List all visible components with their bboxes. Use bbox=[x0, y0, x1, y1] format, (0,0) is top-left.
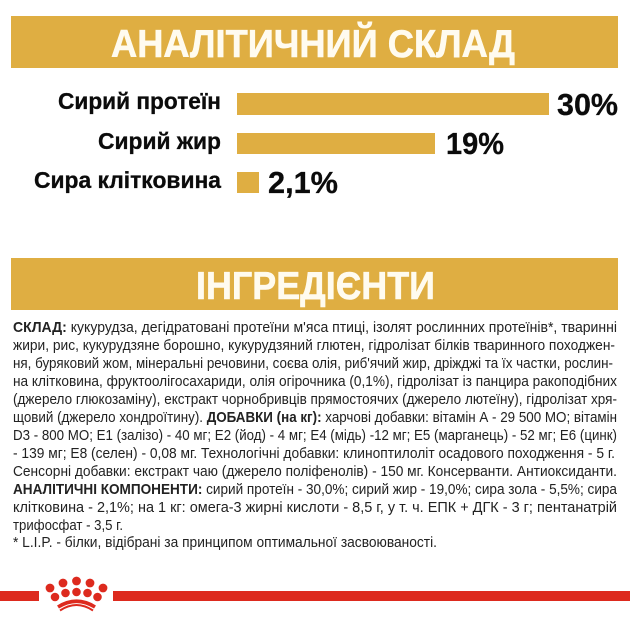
row: crude fat: Сирий жир bbox=[98, 128, 221, 154]
row: crude fibre: 2,1% bbox=[268, 165, 338, 200]
ingredients text block: клітковина - 2,1%; на 1 кг: омега-3 жирні кислоти - 8,5 г, у т. ч. ЕПК + ДГК - 3 г; пентанатрій bbox=[13, 499, 617, 516]
row: crude protein: Сирий протеїн bbox=[58, 88, 221, 114]
row: crude protein: 30% bbox=[557, 87, 618, 122]
row: crude fat: 19% bbox=[446, 126, 504, 161]
row: crude fat bbox=[98, 126, 504, 161]
heading band: ingredients: ІНГРЕДІЄНТИ bbox=[196, 265, 435, 308]
red footer line left bbox=[0, 591, 39, 601]
row: crude fibre: Сира клітковина bbox=[34, 167, 221, 193]
row: crude fibre bbox=[34, 165, 338, 200]
ingredients text block bbox=[13, 319, 618, 551]
heading band: analytical composition: АНАЛІТИЧНИЙ СКЛАД bbox=[111, 21, 515, 66]
heading band: analytical composition bbox=[11, 16, 618, 68]
bar chart bbox=[34, 87, 618, 200]
row: crude protein bbox=[58, 87, 618, 122]
heading band: ingredients bbox=[11, 258, 618, 310]
red footer line right bbox=[113, 591, 630, 601]
panel: analytical composition bbox=[11, 16, 618, 200]
ingredients text block: * L.I.P. - білки, відібрані за принципом оптимальної засвоюваності. bbox=[13, 534, 437, 551]
icon: royal canin crown logo bbox=[46, 577, 107, 610]
ingredients text block: трифосфат - 3,5 г. bbox=[13, 517, 123, 534]
